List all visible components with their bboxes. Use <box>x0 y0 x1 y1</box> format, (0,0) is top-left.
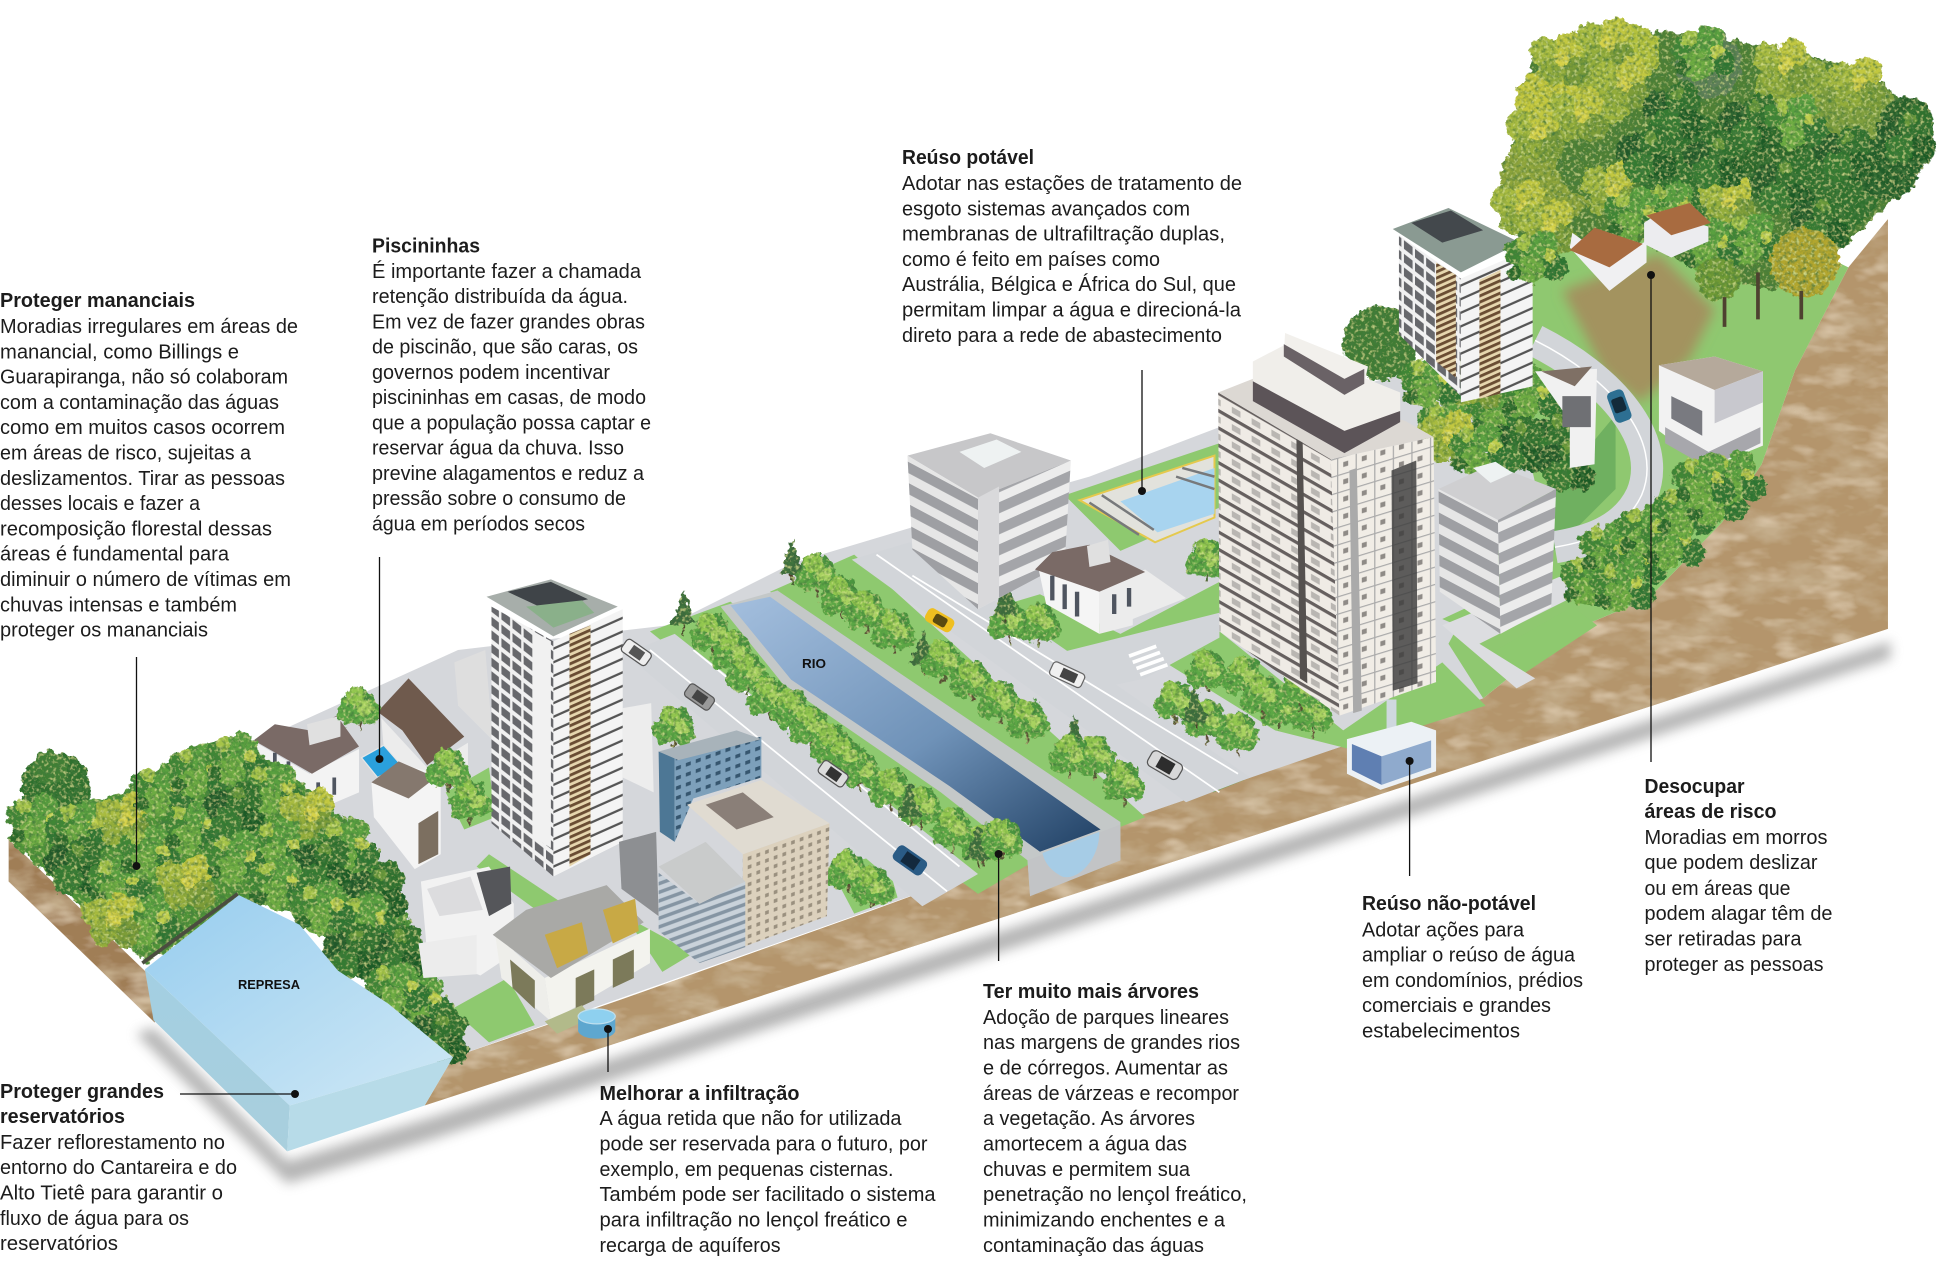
car: blue on curve <box>1606 388 1633 424</box>
text block: Ter muito mais árvores <box>983 981 1247 1257</box>
text block: Reúso não-potável: estabelecimentos <box>1362 1020 1520 1042</box>
ground shadow <box>136 641 1890 1184</box>
text block: Melhorar a infiltração: pode ser reservada para o futuro, por <box>600 1134 928 1156</box>
text block: Desocupar áreas de risco: que podem deslizar <box>1644 852 1818 874</box>
text block: Piscininhas: reservar água da chuva. Isso <box>372 438 624 460</box>
text block: Piscininhas: previne alagamentos e reduz a <box>372 463 645 485</box>
text block: Desocupar áreas de risco <box>1644 776 1832 976</box>
text block: Melhorar a infiltração: recarga de aquíferos <box>600 1235 780 1257</box>
text block: Ter muito mais árvores: nas margens de grandes rios <box>983 1032 1240 1054</box>
trees behind central tower <box>1343 306 1596 491</box>
text block: Piscininhas: piscininhas em casas, de modo <box>372 387 646 409</box>
water left face <box>145 969 290 1151</box>
heading: Desocupar <box>1644 776 1745 798</box>
heading: Piscininhas <box>372 236 480 258</box>
text block: Reúso não-potável: em condomínios, prédios <box>1362 970 1583 992</box>
small trees by tower <box>337 687 696 823</box>
water in canal section <box>1042 832 1099 877</box>
car: silver <box>1146 749 1184 781</box>
car: white <box>620 638 653 667</box>
heading: Reúso não-potável <box>1362 893 1536 915</box>
houses at risk on hilltop <box>1570 203 1711 291</box>
text block: Proteger grandes reservatórios: reservatórios <box>0 1233 118 1255</box>
river trees left bank <box>671 589 1024 910</box>
text block: Reúso não-potável: Adotar ações para <box>1362 920 1525 942</box>
text block: Reúso potável: Austrália, Bélgica e África do Sul, que <box>902 273 1236 296</box>
leader: desocupar <box>1647 271 1655 762</box>
ground surface <box>254 334 1746 1057</box>
text block: Proteger mananciais: Moradias irregulares em áreas de <box>0 316 298 338</box>
text block: Reúso não-potável <box>1362 893 1583 1042</box>
text block: Desocupar áreas de risco: podem alagar têm de <box>1644 903 1832 925</box>
text block: Piscininhas: retenção distribuída da água. <box>372 286 628 308</box>
text block: Proteger mananciais: manancial, como Billings e <box>0 341 239 363</box>
text block: Piscininhas <box>372 236 651 535</box>
car: yellow <box>923 606 956 634</box>
text block: Proteger mananciais: em áreas de risco, sujeitas a <box>0 442 252 464</box>
text block: Proteger grandes reservatórios: fluxo de água para os <box>0 1208 189 1230</box>
text block: Proteger mananciais: com a contaminação das águas <box>0 392 279 414</box>
text block: Proteger grandes reservatórios <box>0 1081 237 1255</box>
text block: Proteger mananciais <box>0 290 298 642</box>
text block: Ter muito mais árvores: minimizando enchentes e a <box>983 1210 1226 1232</box>
text block: Proteger grandes reservatórios: entorno do Cantareira e do <box>0 1157 237 1179</box>
leader lines with dots <box>132 271 1655 1098</box>
infiltration cistern <box>578 1009 615 1039</box>
text block: Desocupar áreas de risco: áreas de risco <box>1644 801 1776 823</box>
text block: Proteger mananciais: diminuir o número de vítimas em <box>0 569 291 591</box>
text block: Reúso potável: membranas de ultrafiltração duplas, <box>902 224 1225 246</box>
text block: Reúso potável <box>902 147 1242 347</box>
trees lower hillside <box>1560 451 1767 613</box>
text block: Reúso potável: Adotar nas estações de tratamento de <box>902 173 1242 195</box>
canal cross-section <box>1028 825 1120 896</box>
text block: Reúso não-potável: ampliar o reúso de água <box>1362 944 1576 966</box>
text block: Proteger mananciais: áreas é fundamental para <box>0 544 230 566</box>
text block: Ter muito mais árvores: chuvas e permitem sua <box>983 1159 1191 1181</box>
text block: Ter muito mais árvores: a vegetação. As árvores <box>983 1108 1195 1130</box>
building: central tall tower <box>1218 333 1436 716</box>
text block: Proteger mananciais: Guarapiranga, não só colaboram <box>0 367 288 389</box>
text block: Proteger grandes reservatórios: reservatórios <box>0 1106 125 1128</box>
text block: Piscininhas: água em períodos secos <box>372 513 585 535</box>
car: white van <box>1048 661 1086 689</box>
label: RIO: RIO <box>802 656 826 671</box>
leader: reuso potavel <box>1138 370 1146 495</box>
water right face <box>287 1057 453 1151</box>
text block: Melhorar a infiltração: exemplo, em pequenas cisternas. <box>600 1159 894 1181</box>
text block: Reúso potável: como é feito em países como <box>902 249 1160 271</box>
crosswalk <box>1129 646 1167 675</box>
heading: Ter muito mais árvores <box>983 981 1199 1003</box>
tree trunks hilltop <box>1725 272 1801 327</box>
leader: infiltracao <box>604 1025 612 1072</box>
text block: Desocupar áreas de risco: ou em áreas que <box>1644 878 1790 900</box>
cars on avenues <box>620 606 1184 877</box>
text block: Ter muito mais árvores: áreas de várzeas e recompor <box>983 1083 1239 1105</box>
icon: pool <box>361 745 401 777</box>
hilltop forest <box>1491 17 1936 301</box>
white house by reservoir <box>418 867 514 978</box>
leader: piscininhas <box>376 557 384 763</box>
river trees right bank <box>780 539 1333 805</box>
text block: Ter muito mais árvores: contaminação das águas <box>983 1235 1204 1257</box>
text block: Proteger mananciais: recomposição florestal dessas <box>0 518 272 540</box>
hill soil patch <box>1562 254 1715 402</box>
text block: Piscininhas: Em vez de fazer grandes obras <box>372 311 645 333</box>
text block: Melhorar a infiltração <box>600 1083 936 1257</box>
text block: Proteger mananciais: desses locais e fazer a <box>0 493 201 515</box>
text block: Melhorar a infiltração: para infiltração no lençol freático e <box>600 1210 908 1232</box>
text block: Reúso não-potável: comerciais e grandes <box>1362 995 1551 1017</box>
water surface <box>145 895 453 1106</box>
house with grey roof and yellow windows <box>493 885 650 1034</box>
heading: Reúso potável <box>902 147 1034 169</box>
houses along curved road <box>1535 357 1763 468</box>
left cluster: houses and pool <box>254 650 654 869</box>
text block: Piscininhas: pressão sobre o consumo de <box>372 488 626 510</box>
leader: mananciais <box>132 657 140 870</box>
soil cross-section and hillside <box>9 219 1888 1106</box>
text block: Proteger grandes reservatórios: Fazer reflorestamento no <box>0 1132 225 1154</box>
car: silver 2 <box>817 759 850 788</box>
building: tower left <box>487 579 623 877</box>
leader: grandes reservatorios <box>180 1090 299 1098</box>
text block: Piscininhas: governos podem incentivar <box>372 362 610 384</box>
treatment plant: potable reuse <box>1080 456 1214 542</box>
text block: Proteger mananciais: deslizamentos. Tirar as pessoas <box>0 468 285 490</box>
heading: Proteger grandes <box>0 1081 164 1103</box>
grass patches <box>446 415 1616 1042</box>
car: dark blue <box>891 843 929 877</box>
leader: arvores <box>995 850 1003 961</box>
text block: Piscininhas: que a população possa captar e <box>372 412 651 434</box>
hillside grass <box>1448 235 1848 698</box>
text block: Reúso potável: permitam limpar a água e direcioná-la <box>902 300 1242 322</box>
building: mid-rise left of central tower <box>907 433 1071 609</box>
text block: Proteger mananciais: proteger os mananciais <box>0 620 208 642</box>
reservoir <box>145 895 453 1151</box>
heading: Melhorar a infiltração <box>600 1083 800 1105</box>
left forest <box>6 732 469 1065</box>
building: tower upper right <box>1393 208 1533 402</box>
text block: Reúso potável: esgoto sistemas avançados com <box>902 198 1190 220</box>
water pipe and non-potable reuse tank <box>1347 699 1436 790</box>
text block: Ter muito mais árvores: amortecem a água das <box>983 1134 1187 1156</box>
label: REPRESA: REPRESA <box>238 977 301 992</box>
text block: Ter muito mais árvores: penetração no lençol freático, <box>983 1184 1247 1206</box>
text block: Proteger mananciais: como em muitos casos ocorrem <box>0 417 285 439</box>
text block: Reúso potável: direto para a rede de abastecimento <box>902 325 1222 347</box>
retaining wall at reservoir <box>142 894 238 963</box>
text block: Melhorar a infiltração: Também pode ser facilitado o sistema <box>600 1184 936 1206</box>
text block: Proteger mananciais: chuvas intensas e também <box>0 594 237 616</box>
building: mid-rise right <box>1439 462 1556 634</box>
river canal <box>721 591 1120 896</box>
text block: Piscininhas: É importante fazer a chamada <box>372 260 642 283</box>
text block: Piscininhas: de piscinão, que são caras, os <box>372 336 638 358</box>
house near avenue <box>1035 540 1186 634</box>
car: grey <box>683 682 716 712</box>
text block: Desocupar áreas de risco: Moradias em morros <box>1644 827 1828 849</box>
leader: reuso nao potavel <box>1406 757 1414 876</box>
text block: Melhorar a infiltração: A água retida que não for utilizada <box>600 1108 902 1130</box>
main roads <box>625 340 1647 906</box>
text block: Ter muito mais árvores: Adoção de parques lineares <box>983 1007 1229 1029</box>
text block: Ter muito mais árvores: e de córregos. Aumentar as <box>983 1058 1228 1080</box>
commercial buildings: blue, beige, grey <box>619 730 829 963</box>
text block: Proteger grandes reservatórios: Alto Tietê para garantir o <box>0 1182 223 1204</box>
text block: Desocupar áreas de risco: ser retiradas para <box>1644 928 1802 950</box>
heading: Proteger mananciais <box>0 290 195 312</box>
text block: Desocupar áreas de risco: proteger as pessoas <box>1644 954 1824 976</box>
